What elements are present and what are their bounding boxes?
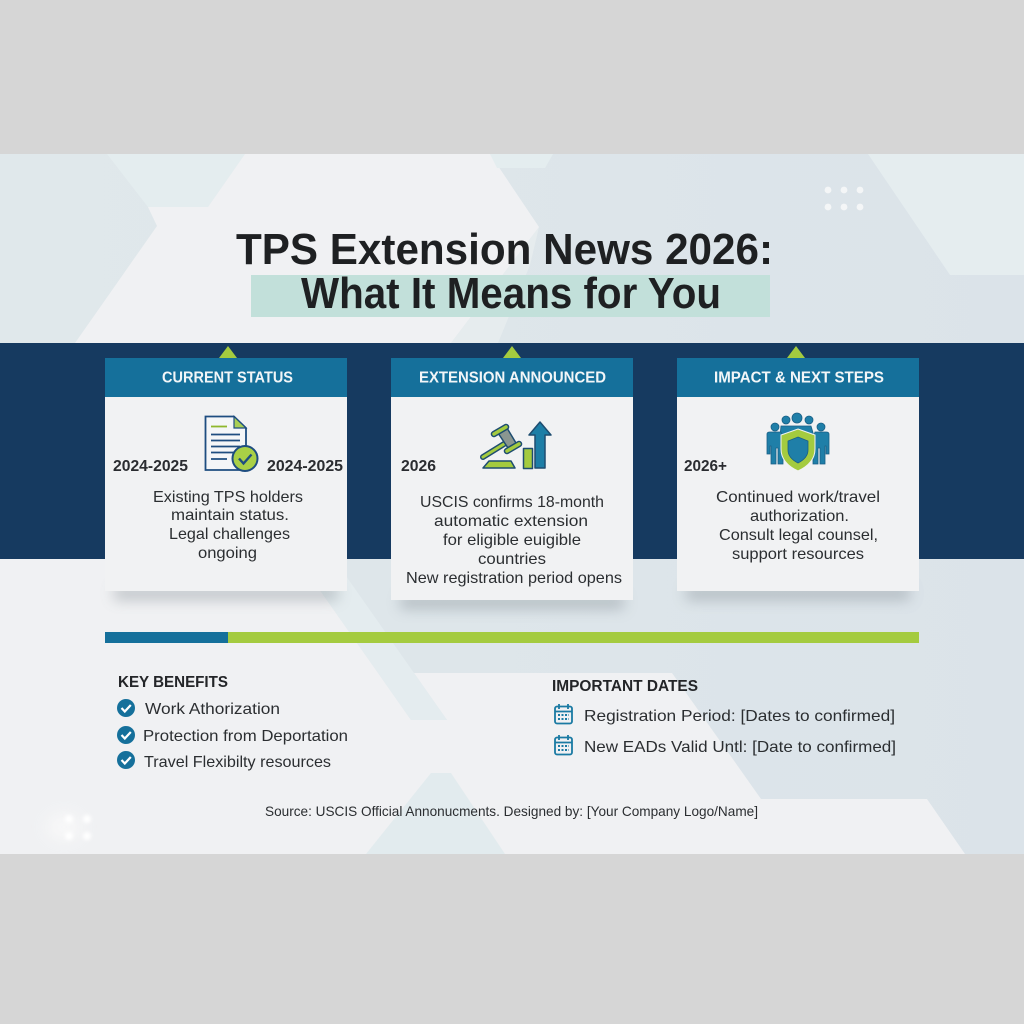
date row: registration period: Registration Period: [Dates to confirmed] — [584, 708, 895, 725]
icon: gavel and rising arrow — [483, 422, 551, 468]
date right: 2024-2025 — [267, 458, 343, 475]
card body text: ongoing — [198, 545, 257, 562]
title: TPS Extension News 2026: — [236, 225, 773, 274]
card body text — [406, 494, 622, 587]
card body text: Legal challenges — [169, 526, 290, 543]
benefit: protection from deportation: Protection from Deportation — [143, 728, 348, 745]
benefit: work authorization: Work Athorization — [145, 701, 280, 718]
panel: key benefits — [117, 674, 348, 771]
date row: new EADs valid until: New EADs Valid Untl: [Date to confirmed] — [584, 739, 896, 756]
important dates heading: IMPORTANT DATES — [552, 678, 698, 695]
date: 2026 — [401, 458, 436, 475]
card body text — [716, 489, 880, 563]
panel: current status — [105, 358, 347, 600]
card body text: maintain status. — [171, 507, 289, 524]
card header — [105, 358, 347, 397]
title — [236, 225, 773, 318]
card body text: Existing TPS holders — [153, 489, 303, 506]
card heading: CURRENT STATUS — [162, 370, 293, 386]
title: What It Means for You — [301, 269, 721, 318]
benefit: travel flexibility: Travel Flexibilty resources — [144, 754, 331, 771]
card body text — [153, 489, 303, 562]
card body text: for eligible euigible — [443, 532, 581, 549]
progress markers — [219, 346, 805, 358]
panel: navy band — [0, 343, 1024, 559]
panel: header background with hexagon shapes — [0, 154, 1024, 343]
key benefits heading: KEY BENEFITS — [118, 674, 228, 691]
card body text: automatic extension — [434, 513, 588, 530]
icon: people with shield — [767, 413, 829, 471]
card body text: New registration period opens — [406, 570, 622, 587]
card body text: USCIS confirms 18-month — [420, 494, 604, 511]
title highlight — [251, 275, 770, 317]
decorative blurred dots bottom left — [46, 813, 91, 841]
date row: new EADs valid until — [555, 735, 896, 756]
card body text: Continued work/travel — [716, 489, 880, 506]
card body text: authorization. — [750, 508, 849, 525]
decorative dots top right — [825, 187, 863, 210]
icon: document with check — [206, 416, 258, 471]
divider progress bar — [105, 632, 919, 643]
card header — [677, 358, 919, 397]
benefit: work authorization — [117, 699, 280, 718]
card body text: countries — [478, 551, 546, 568]
source line: Source: USCIS Official Annonucments. Designed by: [Your Company Logo/Name] — [265, 803, 758, 819]
panel: impact and next steps — [677, 358, 919, 600]
date row: registration period — [555, 704, 895, 725]
card heading: IMPACT & NEXT STEPS — [714, 370, 884, 386]
date: 2026+ — [684, 458, 727, 475]
card body text: support resources — [732, 546, 864, 563]
panel: extension announced — [391, 358, 633, 609]
panel: important dates — [552, 678, 896, 756]
date left: 2024-2025 — [113, 458, 188, 475]
card heading: EXTENSION ANNOUNCED — [419, 370, 606, 386]
panel: bottom background — [0, 559, 1024, 854]
card header — [391, 358, 633, 397]
card body text: Consult legal counsel, — [719, 527, 878, 544]
